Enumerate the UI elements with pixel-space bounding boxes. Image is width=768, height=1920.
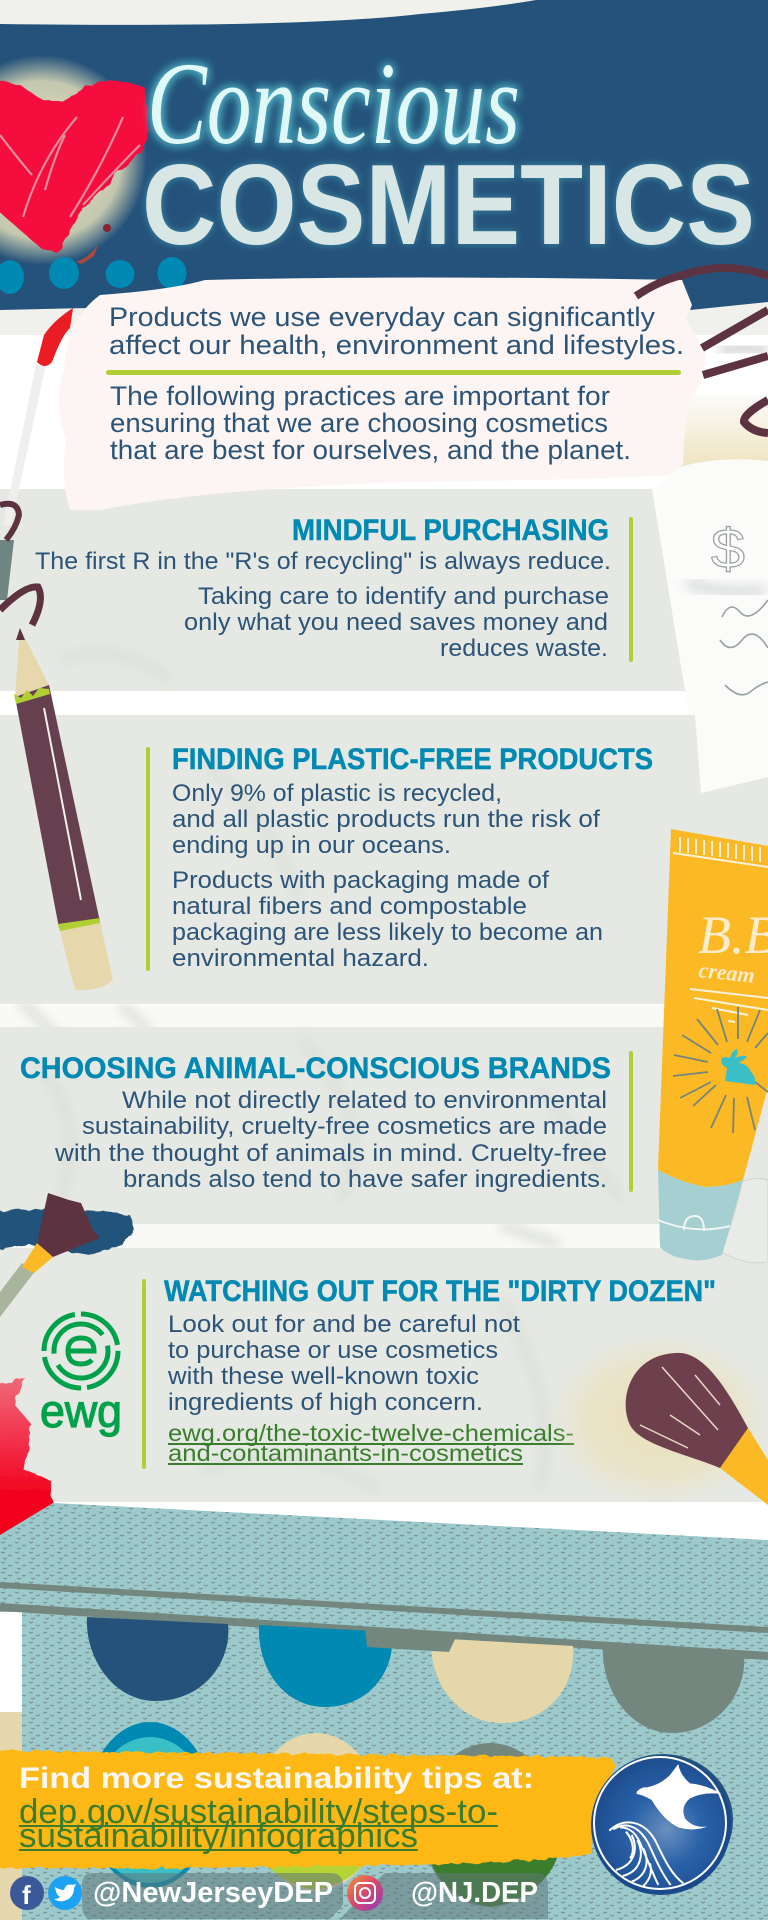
panel: intro: that are best for ourselves, and the planet. [110, 435, 631, 465]
icon: instagram [347, 1875, 383, 1911]
decorative blue dots [0, 257, 186, 294]
ewg link: and-contaminants-in-cosmetics [168, 1440, 523, 1466]
panel: strip four background [0, 1248, 768, 1502]
icon: facebook [10, 1876, 44, 1910]
brush glow [550, 1335, 768, 1505]
social backing [82, 1873, 548, 1919]
body text: natural fibers and compostable [172, 893, 527, 920]
body text: Look out for and be careful not [168, 1311, 520, 1338]
social media row [10, 1873, 548, 1919]
icon: twitter [48, 1876, 82, 1910]
body text: Products with packaging made of [172, 867, 549, 894]
body text: Taking care to identify and purchase [198, 583, 609, 610]
shadow well gray [603, 1643, 744, 1733]
marble background [0, 0, 768, 1248]
cream blob [722, 1178, 768, 1263]
body text: sustainability, cruelty-free cosmetics are made [82, 1113, 607, 1140]
panel: intro: The following practices are important for [110, 381, 610, 411]
heading: MINDFUL PURCHASING [292, 514, 609, 547]
icon: cup and maroon scribble [0, 504, 40, 625]
panel: strip three background [0, 1027, 768, 1224]
section: animal-conscious [20, 1051, 633, 1193]
body text: ending up in our oceans. [172, 832, 451, 859]
icon: blush brush [626, 1353, 768, 1505]
icon: painted heart [0, 76, 148, 253]
wave [609, 1822, 683, 1886]
panel: intro: ensuring that we are choosing cosmetics [110, 408, 608, 438]
handle: facebook and twitter: @NewJerseyDEP [93, 1877, 333, 1909]
section: plastic-free [146, 743, 653, 972]
panel: intro: affect our health, environment and lifestyles. [109, 330, 684, 360]
marble veins [30, 653, 620, 1490]
body text: Only 9% of plastic is recycled, [172, 780, 502, 807]
banner heading: Find more sustainability tips at: [19, 1762, 534, 1795]
palette clasp [365, 1628, 456, 1652]
title script line: Conscious [147, 38, 520, 169]
body text: and all plastic products run the risk of [172, 806, 600, 833]
heart glow [0, 55, 147, 265]
icon: facebook: f [22, 1880, 31, 1910]
tube label small: cream [697, 957, 756, 988]
shadow well blue [259, 1625, 392, 1707]
heart brush streaks [0, 117, 140, 217]
body text: reduces waste. [440, 635, 608, 662]
red paint blotch [0, 1378, 53, 1537]
banner: find more tips [0, 1750, 615, 1868]
panel: bottom eyeshadow palette [0, 1503, 768, 1920]
navy title band [0, 0, 768, 310]
body text: with these well-known toxic [167, 1363, 479, 1390]
body text: only what you need saves money and [184, 609, 608, 636]
sun rays [673, 1007, 768, 1133]
section: mindful purchasing [35, 514, 633, 662]
logo: NJ DEP seal [591, 1754, 733, 1895]
icon: cream tube [658, 829, 768, 1260]
panel: strip one background [0, 489, 685, 691]
icon: bunny [721, 1049, 755, 1085]
heading: CHOOSING ANIMAL-CONSCIOUS BRANDS [20, 1052, 611, 1085]
squiggle lines [720, 600, 768, 695]
tube cap [658, 1170, 743, 1260]
icon: fan brush [0, 1193, 135, 1317]
handle: instagram: @NJ.DEP [411, 1877, 538, 1909]
body text [54, 1087, 607, 1193]
body text [167, 1311, 520, 1416]
heading: FINDING PLASTIC-FREE PRODUCTS [172, 743, 653, 776]
shadow well navy [87, 1617, 228, 1701]
panel: strip two background [0, 715, 768, 1004]
accent bar [146, 747, 150, 971]
body text: with the thought of animals in mind. Cruelty-free [54, 1140, 607, 1167]
banner link [19, 1793, 498, 1855]
banner link: sustainability/infographics [19, 1817, 418, 1855]
dove [637, 1764, 722, 1829]
body text [35, 548, 611, 662]
section: dirty dozen [142, 1275, 716, 1469]
body text: While not directly related to environmental [122, 1087, 607, 1114]
accent bar [629, 517, 633, 662]
icon: EWG logo [40, 1314, 122, 1437]
maroon scribble top right [636, 268, 768, 433]
body text [172, 780, 603, 972]
ewg link [168, 1420, 574, 1466]
body text: packaging are less likely to become an [172, 919, 603, 946]
cap detail [658, 1216, 730, 1231]
accent bar [629, 1051, 633, 1192]
shadow well beige [431, 1638, 573, 1723]
lower row wells [88, 1722, 561, 1907]
tube ticks [673, 837, 768, 1022]
palette hinge lines [0, 1585, 768, 1630]
body text: to purchase or use cosmetics [168, 1337, 498, 1364]
icon: pencil [14, 628, 113, 990]
panel: intro [58, 278, 707, 510]
panel: white paper [680, 459, 768, 696]
intro text: Products we use everyday can significantly [109, 302, 656, 332]
banner link: dep.gov/sustainability/steps-to- [19, 1793, 498, 1831]
icon: lipstick applicator [3, 308, 73, 525]
icon: dollar sign: $ [711, 517, 745, 580]
brown smudge [76, 245, 98, 264]
paint dot [103, 224, 111, 232]
body text: ingredients of high concern. [168, 1389, 483, 1416]
heading: WATCHING OUT FOR THE "DIRTY DOZEN" [164, 1275, 716, 1308]
ewg wordmark: ewg [40, 1385, 122, 1437]
body text: brands also tend to have safer ingredients. [123, 1166, 607, 1193]
accent bar [142, 1279, 146, 1469]
body text: The first R in the "R's of recycling" is always reduce. [35, 548, 611, 575]
title [142, 57, 755, 249]
body text: environmental hazard. [172, 945, 429, 972]
ewg link: ewg.org/the-toxic-twelve-chemicals- [168, 1420, 574, 1446]
